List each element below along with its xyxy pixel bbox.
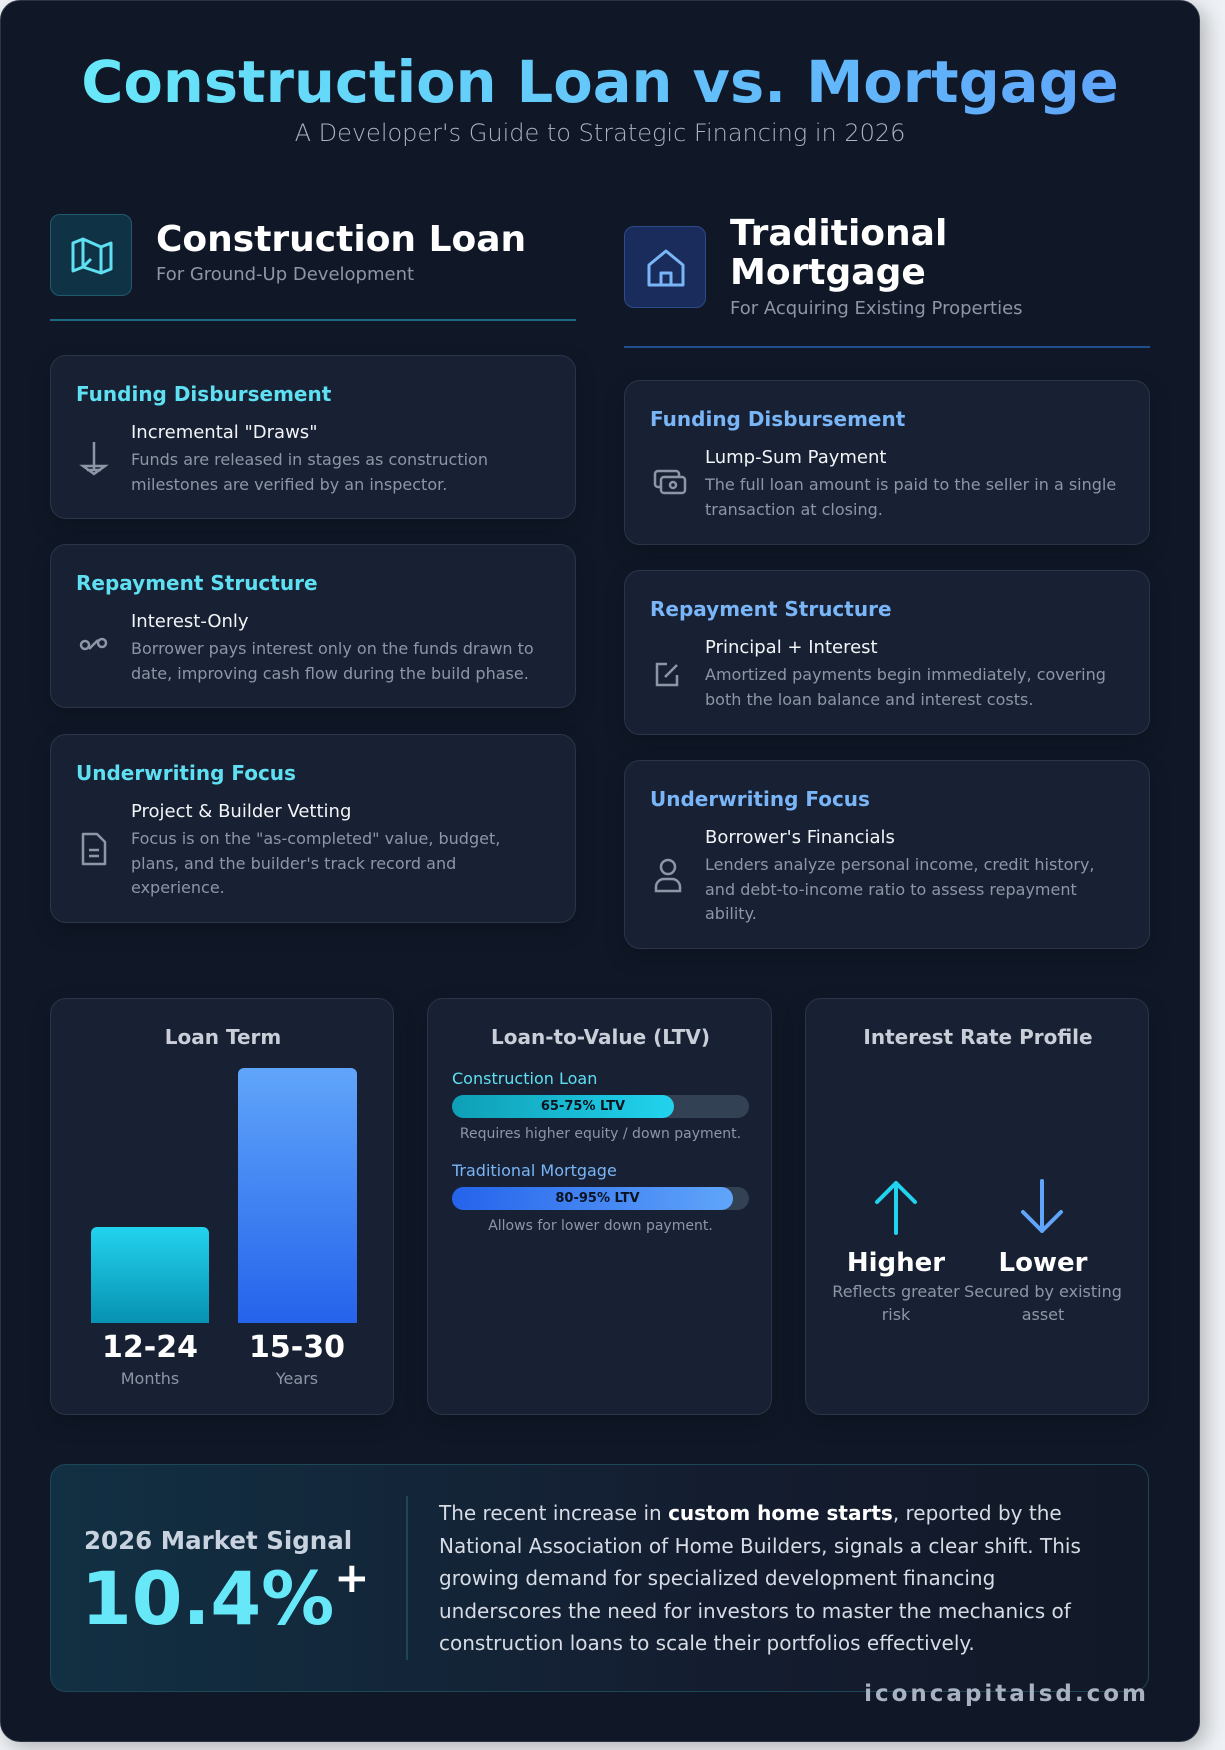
panel: interest rate: Reflects greater risk: [832, 1282, 960, 1324]
panel: loan term: Loan Term: [165, 1025, 281, 1049]
panel: interest rate: [805, 998, 1149, 1415]
bar chart: [91, 1068, 357, 1388]
right card 1: Lump-Sum Payment: [705, 447, 886, 468]
icon: edit: [656, 662, 678, 686]
bar chart: 12-24: [102, 1330, 198, 1365]
left card 2: Repayment Structure: [76, 571, 318, 595]
left card 3: Focus is on the "as-completed" value, budget, plans, and the builder's track record and experience.: [131, 829, 500, 897]
title: Construction Loan vs. Mortgage: [81, 49, 1119, 116]
icon: house: [624, 226, 706, 308]
panel: LTV: Loan-to-Value (LTV): [491, 1025, 710, 1049]
callout: market signal: 2026 Market Signal: [84, 1526, 352, 1555]
right card 3: Underwriting Focus: [650, 787, 870, 811]
right card 3: [624, 760, 1150, 949]
right card 3: Borrower's Financials: [705, 827, 895, 848]
footer url: iconcapitalsd.com: [864, 1681, 1149, 1707]
right header: [624, 213, 1150, 348]
left card 3: Underwriting Focus: [76, 761, 296, 785]
icon: draw: [79, 442, 109, 476]
icon: document: [82, 832, 106, 866]
left card 1: Incremental "Draws": [131, 422, 317, 443]
bar chart: Years: [276, 1369, 318, 1388]
panel: LTV: Traditional Mortgage: [452, 1161, 617, 1180]
right card 3: Lenders analyze personal income, credit history, and debt-to-income ratio to assess repayment ability.: [705, 855, 1095, 923]
panel: interest rate: Interest Rate Profile: [863, 1025, 1093, 1049]
left card 3: Project & Builder Vetting: [131, 801, 351, 822]
right header: For Acquiring Existing Properties: [730, 298, 1023, 319]
panel: LTV: Construction Loan: [452, 1069, 597, 1088]
panel: interest rate: Higher: [847, 1248, 945, 1278]
bar: mortgage LTV: 80-95% LTV: [555, 1191, 640, 1206]
bar: mortgage LTV: [452, 1187, 749, 1210]
left card 1: [50, 355, 576, 519]
panel: LTV: Requires higher equity / down payment.: [460, 1126, 741, 1142]
heading: Traditional: [730, 213, 947, 254]
panel: loan term: [50, 998, 394, 1415]
left card 1: Funding Disbursement: [76, 382, 331, 406]
panel: LTV: Allows for lower down payment.: [488, 1218, 713, 1234]
icon: up arrow: [874, 1180, 918, 1235]
right card 2: Amortized payments begin immediately, covering both the loan balance and interest costs.: [705, 665, 1106, 708]
left card 2: Interest-Only: [131, 611, 249, 632]
icon: down arrow: [1020, 1179, 1064, 1234]
callout: market signal: [50, 1464, 1149, 1692]
right card 1: The full loan amount is paid to the seller in a single transaction at closing.: [705, 475, 1116, 518]
icon: percent: [80, 638, 108, 650]
bar: construction LTV: [452, 1095, 749, 1118]
bar: construction LTV: 65-75% LTV: [541, 1099, 625, 1114]
left card 2: [50, 544, 576, 708]
heading: Construction Loan: [156, 219, 526, 260]
icon: cash: [654, 470, 686, 494]
callout: market signal: The recent increase in custom home starts, reported by the National Association of Home Builders, signals a clear shift. This growing demand for specialized development financing underscores the need for investors to master the mechanics of construction loans to scale their portfolios effectively.: [439, 1501, 1081, 1655]
bar chart: Months: [121, 1369, 179, 1388]
callout: market signal: 10.4%+: [81, 1553, 369, 1642]
subtitle: A Developer's Guide to Strategic Financing in 2026: [295, 119, 905, 147]
right card 2: [624, 570, 1150, 735]
left card 3: [50, 734, 576, 923]
panel: interest rate: Lower: [999, 1248, 1087, 1278]
right card 1: Funding Disbursement: [650, 407, 905, 431]
left card 1: Funds are released in stages as construction milestones are verified by an inspector.: [131, 450, 488, 494]
icon: user: [654, 858, 682, 892]
heading: [730, 213, 947, 293]
left header: For Ground-Up Development: [156, 264, 414, 285]
right card 1: [624, 380, 1150, 545]
right card 2: Principal + Interest: [705, 637, 878, 658]
heading: Mortgage: [730, 252, 926, 293]
icon: map: [50, 214, 132, 296]
left header: [50, 214, 576, 321]
bar chart: 15-30: [249, 1330, 345, 1365]
left card 2: Borrower pays interest only on the funds drawn to date, improving cash flow during the build phase.: [131, 639, 534, 682]
right card 2: Repayment Structure: [650, 597, 892, 621]
panel: interest rate: Secured by existing asset: [964, 1282, 1122, 1324]
panel: LTV: [427, 998, 772, 1415]
